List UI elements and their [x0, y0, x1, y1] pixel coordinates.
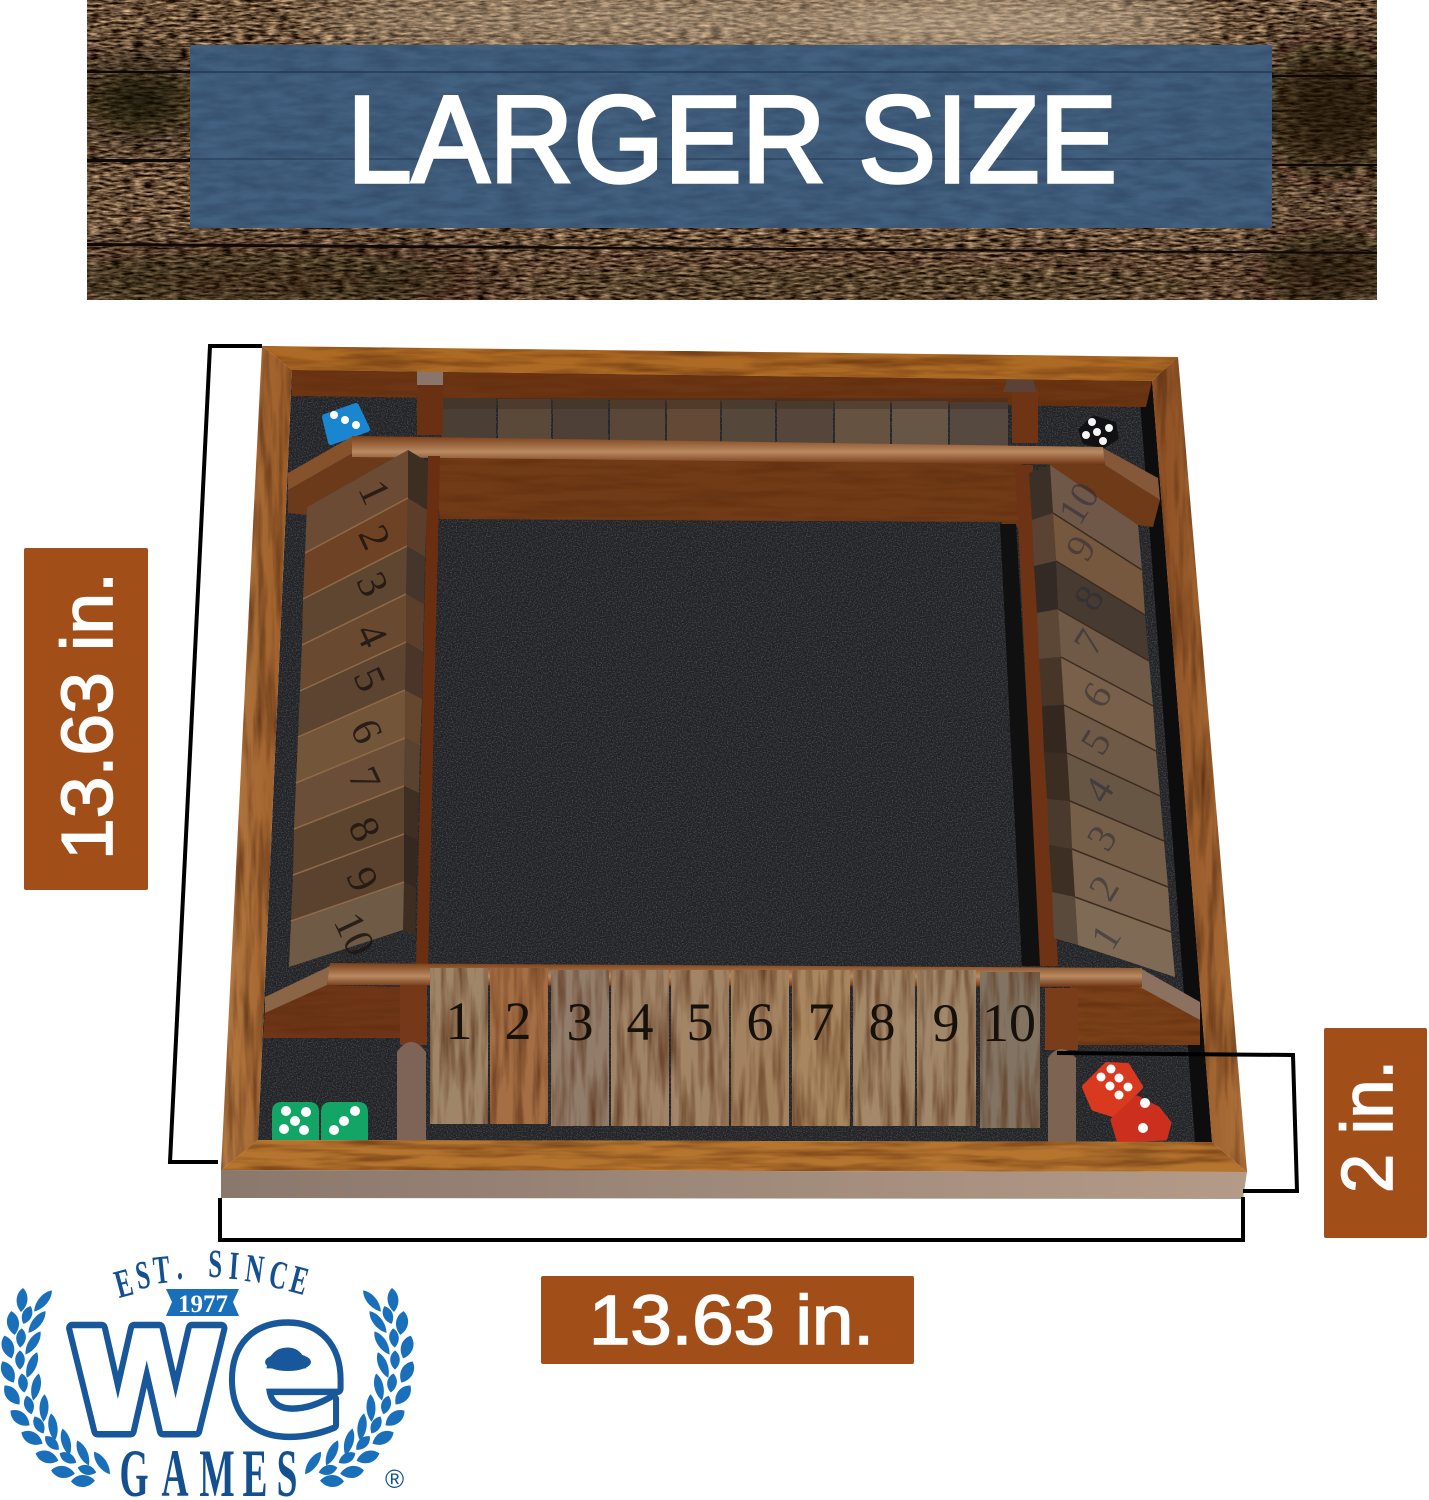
- left tile numbers: 6: [340, 712, 391, 751]
- logo 1977 ribbon: [166, 1289, 239, 1318]
- right centre rail: [1015, 465, 1058, 966]
- left side tiles: [289, 450, 428, 967]
- title banner: [190, 45, 1272, 228]
- bottom left bevel: [265, 966, 330, 1013]
- logo est since: E: [110, 1260, 137, 1307]
- bottom row tiles: [430, 968, 1040, 1128]
- logo laurel right: [301, 1288, 418, 1487]
- left tile numbers: 9: [336, 860, 387, 899]
- right tile numbers: 8: [1064, 577, 1113, 618]
- centre wall: [432, 454, 1022, 526]
- frame front edge: [221, 1170, 1247, 1199]
- left tile numbers: [324, 473, 399, 963]
- right rail shadow: [1000, 524, 1042, 966]
- right side tiles: [1029, 465, 1175, 977]
- dimension line: right height: [1057, 1053, 1297, 1191]
- logo e counter: [265, 1353, 311, 1371]
- dimension line: bottom width: [220, 1197, 1243, 1240]
- label: bottom 13.63 in.: 13.63 in.: [589, 1281, 874, 1359]
- label: right 2 in.: 2 in.: [1328, 1060, 1408, 1193]
- logo: WE Games: [0, 1242, 418, 1500]
- right tile numbers: 4: [1074, 769, 1123, 810]
- right tile numbers: 9: [1056, 527, 1105, 568]
- logo est since: T: [151, 1247, 172, 1293]
- top row tiles: [442, 398, 1008, 447]
- header wood background: [30, 0, 1400, 310]
- bottom tile numbers: 8: [868, 992, 896, 1052]
- logo est since: [110, 1242, 313, 1307]
- game board: [221, 346, 1247, 1199]
- felt base: [258, 370, 1212, 1142]
- bottom tile numbers: 9: [932, 993, 960, 1053]
- logo est since: C: [265, 1252, 291, 1299]
- bottom tile numbers: 6: [746, 992, 774, 1052]
- bottom tile numbers: 4: [626, 992, 654, 1052]
- right tile numbers: 5: [1071, 721, 1120, 762]
- frame right: [1152, 357, 1247, 1172]
- bottom tile numbers: 2: [504, 991, 532, 1051]
- bottom tile numbers: 10: [982, 993, 1036, 1053]
- logo 1977 ribbon: 1977: [178, 1291, 228, 1318]
- bottom tile numbers: 5: [686, 992, 714, 1052]
- right tile numbers: 6: [1072, 674, 1121, 715]
- bottom tile numbers: [446, 991, 1036, 1053]
- top left bevel: [288, 436, 430, 515]
- frame top: [262, 346, 1178, 381]
- left tile numbers: 5: [343, 660, 394, 699]
- logo est since: I: [228, 1244, 240, 1289]
- bottom right post: [1045, 988, 1078, 1142]
- bottom right bevel: [1140, 968, 1200, 1020]
- logo games: [119, 1435, 297, 1500]
- left tile numbers: 2: [348, 518, 399, 557]
- bottom right wall: [1070, 985, 1200, 1045]
- right tile numbers: 2: [1079, 867, 1128, 908]
- left tile numbers: 10: [324, 906, 384, 963]
- logo registered mark: ®: [385, 1464, 404, 1494]
- title text: LARGER SIZE: [347, 72, 1117, 209]
- logo laurel left: [0, 1288, 114, 1487]
- right tile numbers: 10: [1049, 474, 1108, 532]
- logo we wordmark: we: [66, 1257, 346, 1476]
- right tile numbers: [1049, 474, 1130, 957]
- right tile numbers: 1: [1081, 916, 1130, 957]
- right post top: [1003, 377, 1038, 443]
- bottom rail: [327, 963, 1142, 987]
- logo est since: S: [132, 1252, 153, 1299]
- right tile numbers: 3: [1077, 817, 1126, 858]
- bottom tile numbers: 3: [566, 992, 594, 1052]
- left centre rail: [416, 456, 440, 968]
- label: right 2 in.: [1324, 1028, 1427, 1238]
- icon: blue die: [325, 406, 367, 442]
- logo est since: E: [286, 1257, 313, 1304]
- top right bevel: [1040, 448, 1160, 527]
- left tile numbers: 8: [338, 810, 389, 849]
- label: bottom 13.63 in.: [541, 1276, 914, 1364]
- right inner shadow: [1140, 381, 1212, 1142]
- icon: green dice: [272, 1102, 368, 1140]
- left tile numbers: 7: [338, 760, 389, 799]
- dimension line: left height: [170, 346, 262, 1162]
- right tile numbers: 7: [1064, 621, 1113, 662]
- left tile numbers: 4: [345, 616, 396, 655]
- left post top: [417, 371, 443, 435]
- icon: black die: [1081, 418, 1116, 446]
- left tile numbers: 1: [348, 473, 399, 512]
- bottom left wall: [263, 985, 400, 1038]
- bottom tile numbers: 7: [808, 992, 834, 1052]
- centre felt: [428, 519, 1022, 966]
- frame left: [221, 346, 292, 1170]
- frame bottom: [221, 1140, 1247, 1172]
- left tile numbers: 3: [346, 565, 397, 604]
- label: left 13.63 in.: 13.63 in.: [48, 572, 128, 860]
- logo est since: N: [243, 1246, 266, 1293]
- top rail: [352, 436, 1105, 465]
- top inner wall: [292, 370, 1152, 407]
- icon: red dice: [1085, 1064, 1169, 1140]
- logo est since: .: [177, 1244, 183, 1289]
- label: left 13.63 in.: [24, 548, 148, 890]
- logo est since: S: [208, 1242, 223, 1287]
- bottom left post: [397, 985, 427, 1140]
- bottom tile numbers: 1: [446, 991, 472, 1051]
